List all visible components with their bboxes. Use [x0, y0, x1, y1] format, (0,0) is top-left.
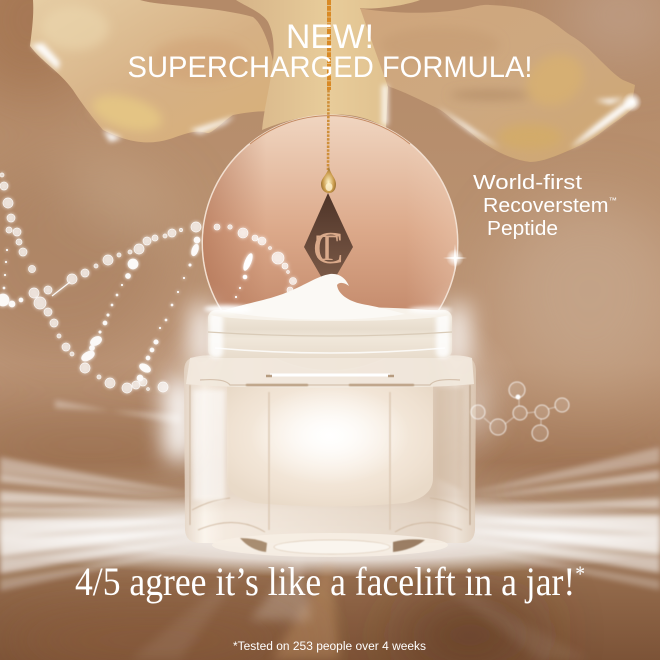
glass jar [165, 274, 482, 557]
petal sheen [41, 6, 593, 150]
jar base dome [212, 533, 448, 557]
heading [128, 18, 532, 84]
diamond logo with CT monogram: C [313, 222, 344, 273]
connector link [52, 282, 70, 296]
lid of the jar [202, 114, 467, 372]
molecule droplets right [471, 382, 569, 441]
diamond logo with CT monogram: T [316, 228, 338, 269]
rising arc [67, 222, 201, 284]
diamond logo with CT monogram [304, 193, 353, 285]
light rays on the floor [0, 400, 660, 660]
jar body [184, 358, 476, 543]
lid sparkle [443, 244, 467, 272]
cream swirl [222, 274, 405, 320]
rung one [128, 259, 138, 269]
cream surface [210, 307, 450, 321]
facets [190, 385, 470, 532]
claim: peptide: ™ [608, 196, 617, 205]
glow around the jar shoulders [165, 305, 482, 460]
dna strand made of sparkling droplets [0, 173, 201, 393]
left petal [30, 0, 280, 142]
left arc [0, 173, 36, 272]
flower petals [30, 0, 642, 162]
base reflections [240, 538, 425, 554]
claim: peptide: Peptide [487, 218, 558, 240]
jar neck [208, 310, 452, 358]
heading line: new: NEW! [286, 18, 374, 56]
footnote: *Tested on 253 people over 4 weeks [233, 641, 426, 653]
dna droplets over the lid [214, 224, 296, 298]
centre glow [250, 385, 410, 485]
white petal highlights [31, 43, 636, 148]
claim: peptide: Recoverstem [483, 195, 601, 217]
claim: peptide: World-first [473, 172, 583, 194]
right glass band [436, 388, 464, 490]
central drape [236, 0, 420, 130]
rung two [194, 237, 200, 243]
heading line: supercharged formula: SUPERCHARGED FORMULA! [128, 51, 532, 84]
right petal [347, 0, 636, 162]
gold chain and droplet [321, 0, 336, 193]
tagline: 4/5 agree it’s like a facelift in a jar! [75, 559, 637, 604]
glow behind the jar [135, 280, 525, 520]
descending strand [29, 286, 168, 393]
claim: peptide [473, 172, 617, 240]
left glass band [193, 390, 225, 500]
cream inside jar [227, 385, 433, 506]
tagline: * [575, 561, 585, 586]
jar shoulder [186, 355, 474, 388]
